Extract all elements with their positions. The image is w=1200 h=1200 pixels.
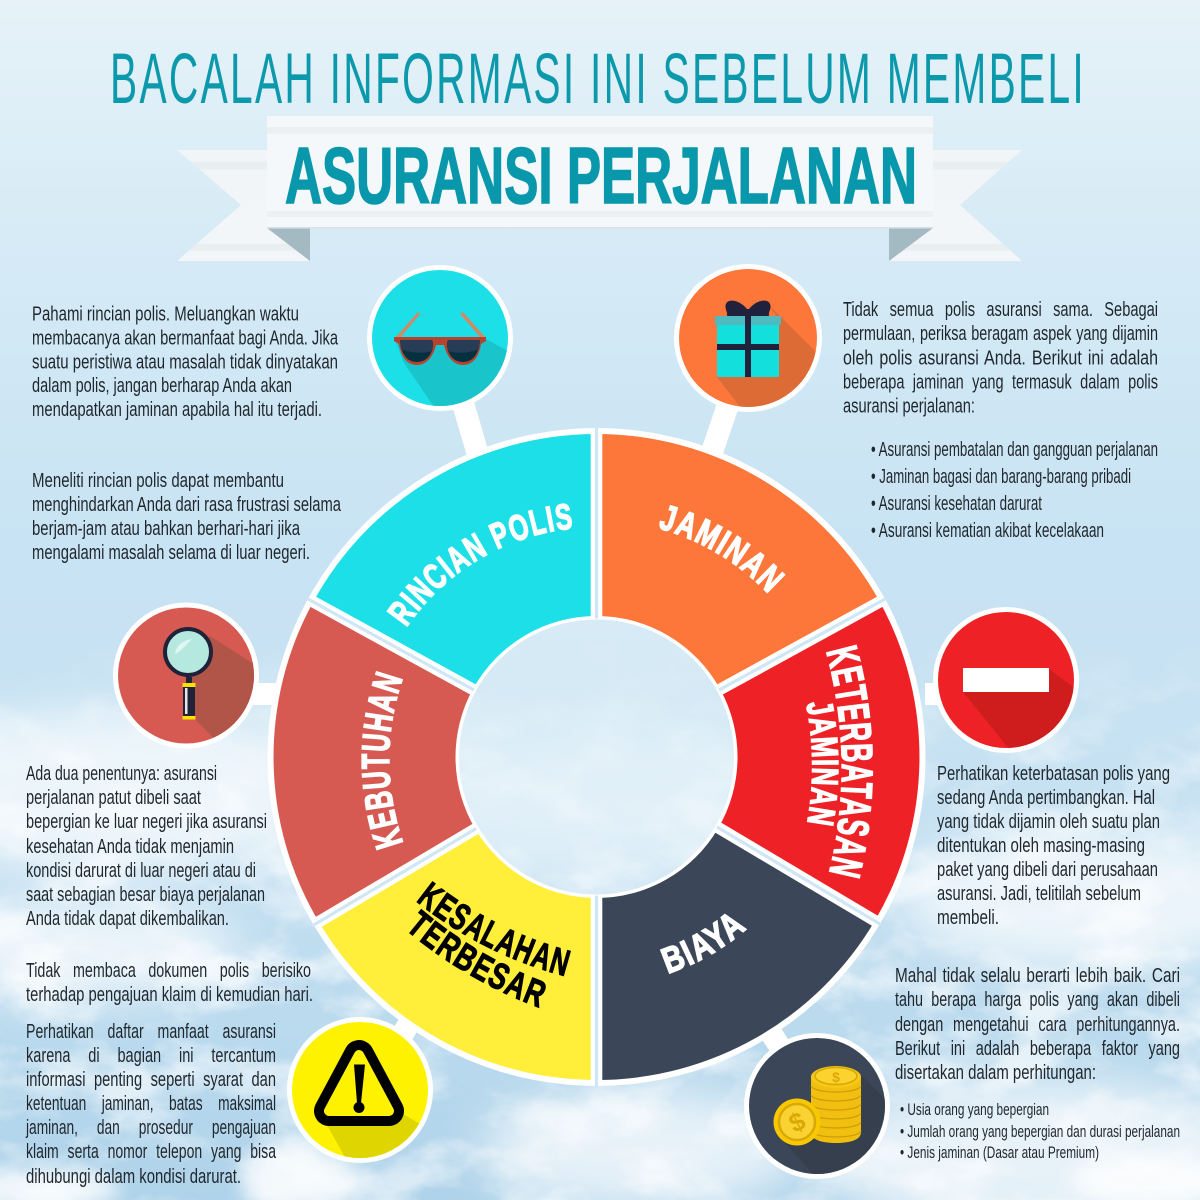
text: kesalahan terbesar details: klaim serta nomor telepon yang bisa — [26, 1141, 277, 1163]
text: kesalahan terbesar details: Perhatikan daftar manfaat asuransi — [26, 1021, 276, 1043]
text: rincian polis benefit: menghindarkan Anda dari rasa frustrasi selama — [32, 494, 342, 516]
text: kesalahan terbesar note: terhadap pengajuan klaim di kemudian hari. — [26, 984, 313, 1006]
text: jaminan list: • Asuransi kesehatan darurat — [871, 493, 1042, 515]
text: kesalahan terbesar note: Tidak membaca dokumen polis berisiko — [26, 960, 311, 982]
connector stems — [250, 400, 945, 1072]
wheel label: kebutuhan: KEBUTUHAN — [361, 670, 404, 850]
text: biaya list: • Jenis jaminan (Dasar atau Premium) — [900, 1144, 1099, 1162]
text: keterbatasan jaminan — [937, 763, 1170, 929]
text: rincian polis intro: dalam polis, jangan berharap Anda akan — [32, 375, 292, 397]
white dividers — [311, 432, 882, 1082]
text: kesalahan terbesar note — [26, 960, 313, 1006]
wheel label: biaya: BIAYA — [660, 914, 748, 974]
text: kebutuhan: kesehatan Anda tidak menjamin — [26, 836, 234, 858]
text: kesalahan terbesar details: dihubungi dalam kondisi darurat. — [26, 1166, 241, 1188]
wheel label: kesalahan: KESALAHAN — [416, 881, 571, 976]
ribbon banner — [177, 116, 1022, 261]
text: biaya list: • Usia orang yang bepergian — [900, 1101, 1049, 1119]
text: kebutuhan: Ada dua penentunya: asuransi — [26, 763, 217, 785]
text: jaminan list — [871, 439, 1158, 542]
text: rincian polis intro: membacanya akan bermanfaat bagi Anda. Jika — [32, 328, 339, 350]
text: kebutuhan: bepergian ke luar negeri jika asuransi — [26, 811, 267, 833]
text: kesalahan terbesar details — [25, 1021, 277, 1188]
text: biaya list — [900, 1101, 1180, 1162]
text: jaminan intro — [843, 299, 1158, 418]
text: biaya — [895, 965, 1180, 1084]
wheel label: terbesar: TERBESAR — [409, 908, 546, 1008]
text: kesalahan terbesar details: jaminan, dan prosedur pengajuan — [25, 1117, 276, 1139]
text: rincian polis benefit: berjam-jam atau bahkan berhari-hari jika — [32, 518, 301, 540]
text: kebutuhan: Anda tidak dapat dikembalikan. — [26, 908, 229, 930]
segment: jaminan — [596, 434, 880, 689]
text: rincian polis benefit — [32, 470, 342, 564]
text: kesalahan terbesar details: karena di bagian ini tercantum — [26, 1045, 276, 1067]
text: jaminan intro: asuransi perjalanan: — [843, 396, 975, 418]
icon: sunglasses — [367, 265, 513, 411]
icon: gold coins: $ — [784, 1105, 810, 1139]
icon: gold coins — [744, 1033, 895, 1180]
icon: magnifying glass — [113, 602, 260, 760]
icon: gold coins: $ — [832, 1069, 840, 1085]
sky gaps between segments — [307, 426, 886, 1088]
text: rincian polis intro: Pahami rincian polis. Meluangkan waktu — [32, 304, 299, 326]
text: kebutuhan: kondisi darurat di luar negeri atau di — [26, 860, 256, 882]
text: kesalahan terbesar details: informasi penting seperti syarat dan — [26, 1069, 276, 1091]
text: biaya: disertakan dalam perhitungan: — [895, 1062, 1096, 1084]
text: rincian polis benefit: Meneliti rincian polis dapat membantu — [32, 470, 284, 492]
text: kebutuhan: perjalanan patut dibeli saat — [26, 787, 201, 809]
segment: kebutuhan — [274, 602, 475, 922]
wheel label: jaminan second line: JAMINAN — [806, 702, 839, 826]
wheel label: jaminan: JAMINAN — [659, 504, 786, 594]
wheel label: rincian polis: RINCIAN POLIS — [386, 503, 572, 627]
icon: no entry sign — [933, 607, 1080, 760]
wheel diagram — [268, 426, 926, 1088]
text: rincian polis intro — [32, 304, 339, 421]
text: kebutuhan — [26, 763, 267, 930]
text: keterbatasan jaminan: membeli. — [937, 907, 999, 929]
icon: warning triangle — [287, 1017, 433, 1170]
text: rincian polis intro: suatu peristiwa atau masalah tidak dinyatakan — [32, 352, 338, 374]
icon: gift box — [674, 264, 830, 420]
text: kesalahan terbesar details: ketentuan jaminan, batas maksimal — [26, 1093, 276, 1115]
segment: keterbatasan jaminan — [718, 602, 919, 921]
segment: rincian polis — [313, 434, 596, 689]
text: kebutuhan: saat sebagian besar biaya perjalanan — [26, 884, 265, 906]
text: rincian polis intro: mendapatkan jaminan apabila hal itu terjadi. — [32, 399, 322, 421]
segment: biaya — [596, 829, 875, 1080]
segment: kesalahan terbesar — [319, 829, 596, 1080]
wheel label: keterbatasan: KETERBATASAN — [826, 644, 874, 879]
text: rincian polis benefit: mengalami masalah selama di luar negeri. — [32, 542, 310, 564]
